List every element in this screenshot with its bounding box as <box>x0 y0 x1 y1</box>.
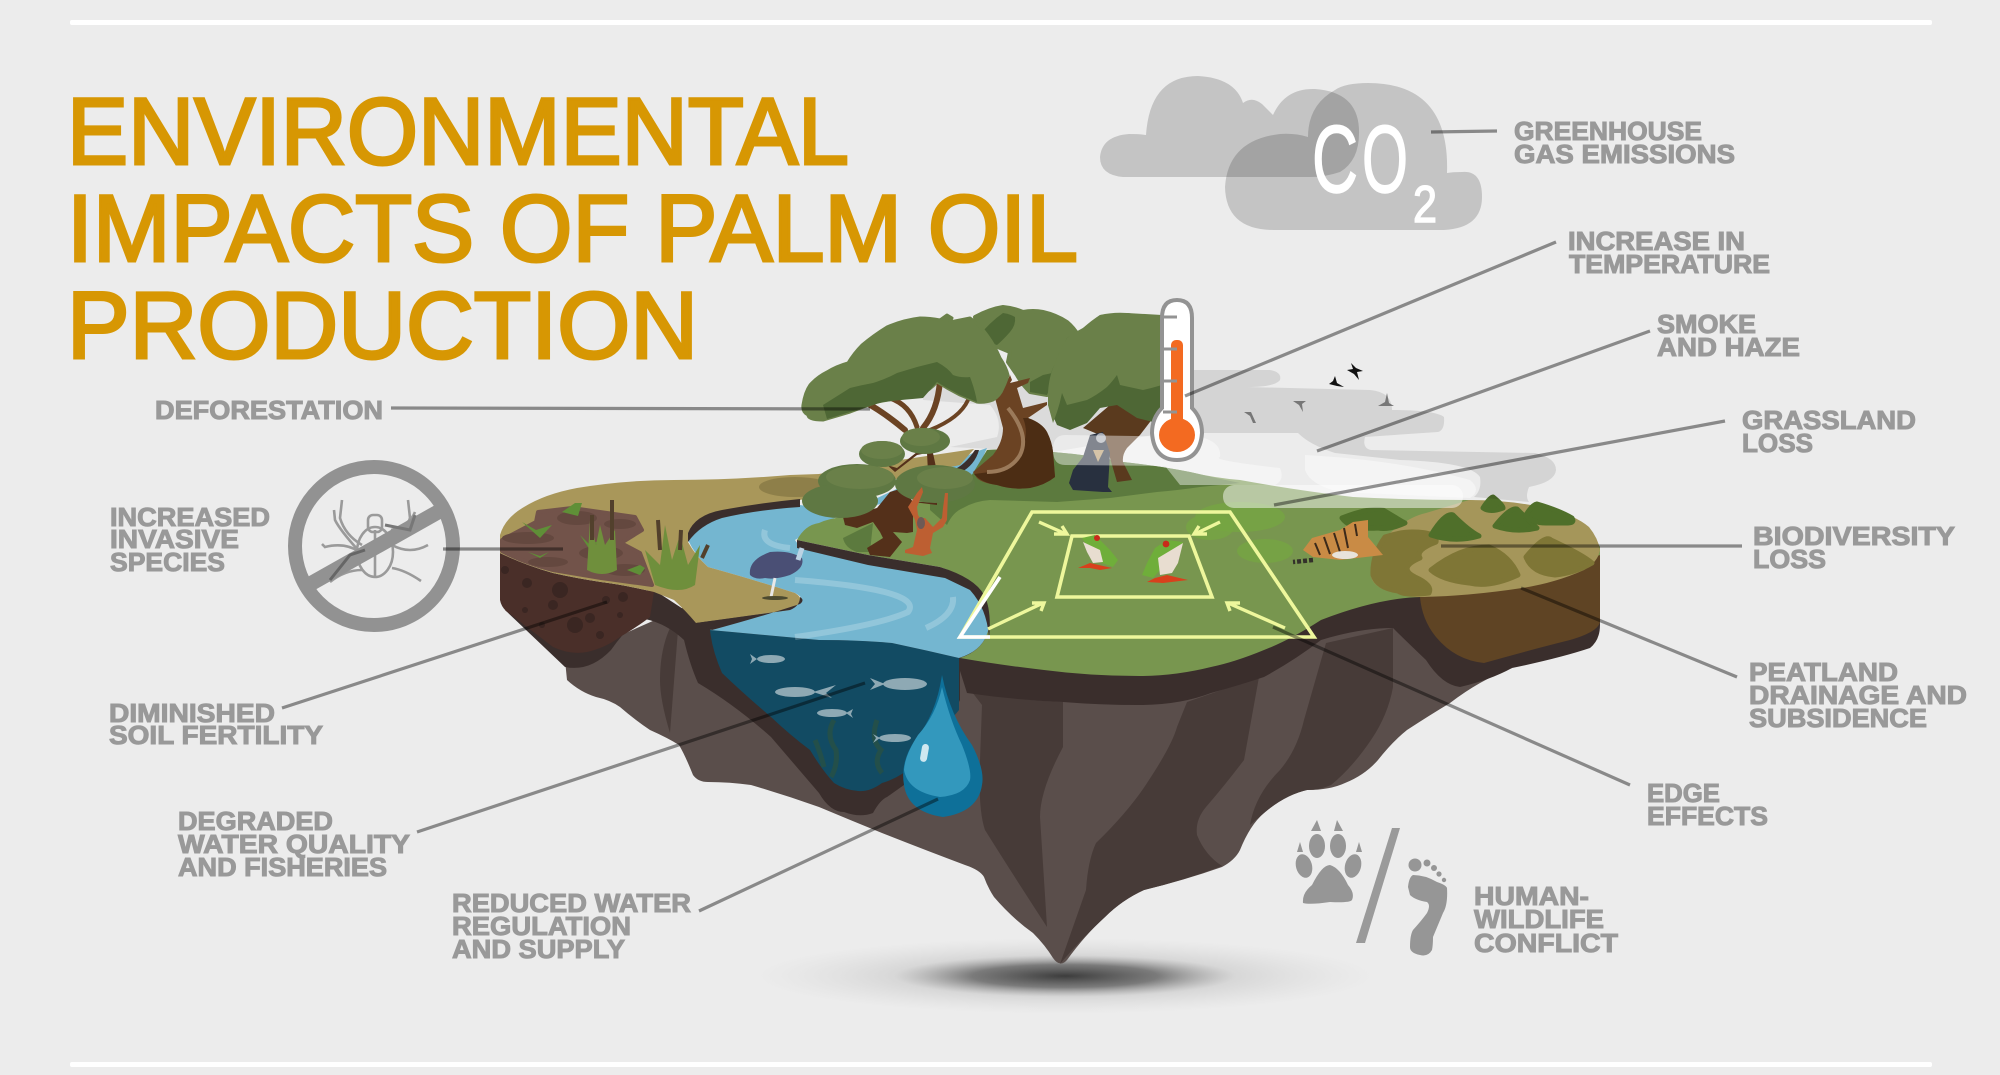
smoke and haze <box>1053 370 1556 508</box>
label: peatland drainage and subsidence: PEATLAND <box>1749 659 1898 687</box>
floating island <box>500 300 1600 964</box>
label: increase in temperature <box>1568 228 1770 279</box>
right canopy shade <box>1048 313 1162 430</box>
label: human-wildlife conflict: HUMAN- <box>1474 883 1589 911</box>
leader lines <box>282 131 1742 911</box>
title <box>67 79 1078 379</box>
smoke behind trees <box>923 380 1165 452</box>
label: biodiversity loss: BIODIVERSITY <box>1753 523 1955 551</box>
label: diminished soil fertility <box>109 700 323 750</box>
thermometer icon <box>1152 300 1202 460</box>
trees <box>802 307 1162 557</box>
cassowary <box>750 548 802 600</box>
peatland patch <box>1342 497 1600 597</box>
insect <box>322 500 428 582</box>
mid tree trunk <box>973 375 1055 489</box>
rock bands <box>660 628 1393 964</box>
edge arrows <box>988 522 1285 629</box>
left canopy <box>803 315 1008 420</box>
tiger <box>1293 520 1383 562</box>
label: degraded water quality and fisheries: DEGRADED <box>178 808 333 836</box>
label: greenhouse gas emissions <box>1514 118 1735 169</box>
edge zone inner trapezoid <box>1057 536 1212 597</box>
orangutan <box>905 487 948 556</box>
label: human-wildlife conflict: WILDLIFE <box>1474 906 1604 934</box>
left canopy shade <box>823 362 977 419</box>
icon: CO2 clouds: O <box>1362 106 1408 213</box>
sand bank <box>500 449 974 623</box>
label: edge effects: EDGE <box>1647 780 1720 808</box>
title: ENVIRONMENTAL <box>67 79 849 185</box>
label: greenhouse gas emissions: GREENHOUSE <box>1514 118 1702 146</box>
right tree trunk <box>1083 405 1153 482</box>
label: grassland loss: LOSS <box>1742 430 1813 458</box>
label: peatland drainage and subsidence: DRAINAGE AND <box>1749 682 1967 710</box>
peat column <box>1420 550 1600 663</box>
icon: CO2 clouds: 2 <box>1413 176 1437 234</box>
label: biodiversity loss: LOSS <box>1753 546 1826 574</box>
label: reduced water regulation and supply <box>452 890 691 964</box>
icon: human footprint <box>1408 858 1447 955</box>
mid canopy <box>975 307 1078 395</box>
dark strata left <box>505 590 960 815</box>
hill shading <box>843 449 1240 552</box>
birds <box>1244 363 1394 423</box>
label: increased invasive species: INCREASED <box>110 504 270 532</box>
label: smoke and haze: AND HAZE <box>1657 334 1800 362</box>
icon: CO2 clouds: C <box>1312 106 1358 213</box>
label: greenhouse gas emissions: GAS EMISSIONS <box>1514 141 1735 169</box>
soil cross-section <box>500 553 654 653</box>
degraded soil top <box>502 503 652 585</box>
label: human-wildlife conflict <box>1474 883 1618 958</box>
label: degraded water quality and fisheries <box>178 808 410 882</box>
icon: paw print <box>1293 820 1364 904</box>
water drop icon <box>903 675 983 817</box>
label: reduced water regulation and supply: REGULATION <box>452 913 631 941</box>
bottom rule <box>70 1062 1932 1067</box>
label: increased invasive species <box>110 504 270 577</box>
dark strata right <box>955 550 1600 705</box>
river surface <box>688 448 989 658</box>
label: peatland drainage and subsidence <box>1749 659 1967 733</box>
label: human-wildlife conflict: CONFLICT <box>1474 930 1618 958</box>
frogs <box>1078 535 1188 583</box>
river right bank <box>797 540 990 640</box>
label: smoke and haze <box>1657 311 1800 362</box>
title: PRODUCTION <box>67 273 698 379</box>
label: deforestation: DEFORESTATION <box>155 397 383 425</box>
label: degraded water quality and fisheries: WATER QUALITY <box>178 831 410 859</box>
label: increased invasive species: SPECIES <box>110 549 225 577</box>
rock base <box>565 600 1512 964</box>
front tree trunk <box>843 488 937 557</box>
icon: slash divider <box>1356 828 1400 943</box>
label: diminished soil fertility: SOIL FERTILITY <box>109 722 323 750</box>
ground shadow <box>755 938 1375 1014</box>
front tree canopies <box>802 428 975 518</box>
bear <box>1069 432 1112 492</box>
edge zone outer trapezoid <box>960 512 1314 637</box>
reeds <box>587 500 708 590</box>
label: grassland loss: GRASSLAND <box>1742 407 1916 435</box>
label: reduced water regulation and supply: AND SUPPLY <box>452 936 625 964</box>
left tree branches <box>865 380 968 430</box>
label: degraded water quality and fisheries: AND FISHERIES <box>178 854 387 882</box>
label: edge effects <box>1647 780 1768 831</box>
label: reduced water regulation and supply: REDUCED WATER <box>452 890 691 918</box>
icon: invasive species prohibition <box>295 467 453 625</box>
label: increase in temperature: TEMPERATURE <box>1569 251 1770 279</box>
icon: CO2 clouds <box>1100 76 1482 234</box>
label: increased invasive species: INVASIVE <box>110 526 239 554</box>
label: increase in temperature: INCREASE IN <box>1568 228 1745 256</box>
water basin <box>710 630 959 791</box>
label: biodiversity loss <box>1753 523 1955 574</box>
river banks <box>688 450 979 630</box>
label: edge effects: EFFECTS <box>1647 803 1768 831</box>
fish <box>750 654 927 743</box>
label: smoke and haze: SMOKE <box>1657 311 1756 339</box>
river overlap of trapezoid <box>960 577 1000 637</box>
label: grassland loss <box>1742 407 1916 458</box>
title: IMPACTS OF PALM OIL <box>67 176 1078 282</box>
right canopy <box>1048 313 1162 423</box>
seaweed <box>815 720 882 777</box>
top rule <box>70 20 1932 25</box>
label: peatland drainage and subsidence: SUBSIDENCE <box>1749 705 1927 733</box>
grass field <box>797 449 1600 676</box>
label: diminished soil fertility: DIMINISHED <box>109 700 275 728</box>
